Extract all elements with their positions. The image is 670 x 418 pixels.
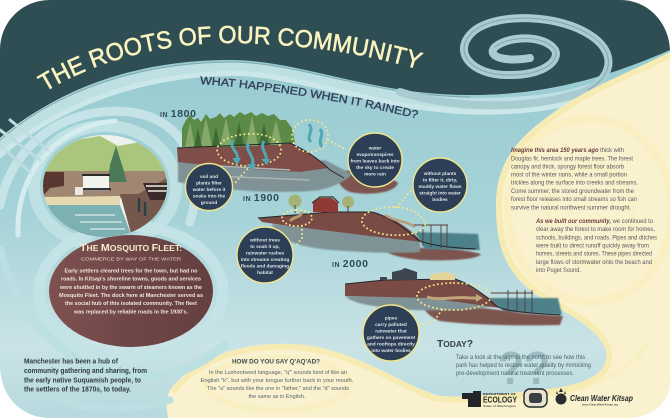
scene: 2000 developed landscape	[345, 268, 563, 326]
text: Manchester community hub: community gathering and sharing, from	[24, 368, 147, 375]
callout: without trees: habitat	[257, 270, 273, 276]
text: Manchester community hub: Manchester has been a hub of	[24, 358, 119, 366]
stormwater pipe	[427, 297, 478, 299]
heading: today: TODAY?	[437, 338, 473, 350]
arrowheads	[232, 158, 270, 171]
stream water	[415, 232, 480, 250]
pronunciation text	[200, 370, 354, 400]
callout: pipes	[363, 305, 419, 361]
dotted callout: muddy flow	[362, 189, 425, 235]
text: as we built our community: schools, buildings, and roads. Pipes and ditches	[536, 235, 657, 241]
dotted callout: evapotranspiration	[292, 120, 345, 152]
text: today	[456, 355, 591, 377]
ground and shore line	[345, 279, 560, 315]
callout: evapotranspiration: from leaves back into	[350, 158, 400, 164]
forest trees	[182, 112, 295, 147]
text: imagine this area: survive the natural northwest summer drought.	[511, 205, 631, 211]
callout: soil and plants: ground	[201, 200, 217, 206]
eroded gully	[290, 212, 302, 221]
logo: Department of Ecology: State of Washington	[483, 404, 516, 408]
panel heading: THE MOSQUITO FLEET:	[80, 243, 182, 254]
trees	[288, 194, 302, 208]
panel body text: roads. In Kitsap's shoreline towns, goods and services	[61, 277, 201, 283]
year label: 1800: IN 1800	[160, 108, 197, 120]
callout: soil and plants: soil and	[200, 174, 218, 180]
callout: pipes: rainwater that	[375, 328, 407, 334]
logo: Department of Ecology: DEPARTMENT OF	[483, 392, 516, 396]
panel body text: Early settlers cleared trees for the town, but had no	[64, 269, 198, 275]
spiral in header	[400, 18, 608, 105]
callout: pipes: pipes	[385, 316, 398, 322]
text: as we built our community: As we built our community, we continued to	[535, 219, 654, 225]
text: today: park has helped to restore water quality by mimicking	[456, 363, 591, 369]
text: Manchester community hub: the settlers of the 1870s, to today.	[24, 386, 131, 394]
logo: Department of Ecology	[462, 391, 518, 408]
callout: without plants: muddy water flows	[418, 184, 462, 190]
panel subheading: COMMERCE BY WAY OF THE WATER	[81, 256, 182, 262]
callout: without trees: floods and damaging	[241, 264, 289, 270]
year label: 1900: IN 1900	[243, 192, 280, 204]
text: imagine this area: trickles along the surface into creeks and streams.	[511, 181, 638, 187]
water	[43, 205, 132, 237]
callout: soil and plants: water before it	[192, 187, 226, 193]
water at shore	[488, 298, 562, 315]
pronunciation text: English "k", but with your tongue further back in your mouth.	[200, 378, 354, 384]
callout: pipes: and rooftops directly	[367, 342, 415, 348]
callout: without trees: rainwater rushes	[246, 250, 285, 256]
posts	[490, 290, 533, 313]
callout: evapotranspiration: water	[368, 146, 381, 152]
brown topsoil	[177, 143, 328, 172]
text: imagine this area: Come summer, the stored groundwater from the	[511, 189, 635, 195]
text: imagine this area: forest floor releases into small streams so fish can	[511, 197, 637, 203]
text: as we built our community: homes, streets and stores. These pipes directed	[536, 252, 652, 258]
callout: without plants: bodies	[432, 197, 448, 203]
panel body text: the social hub of this isolated community. The fleet	[65, 301, 197, 307]
lower brown soil	[423, 306, 563, 325]
beach	[43, 196, 120, 206]
pronunciation heading: HOW DO YOU SAY Q'AQ'AD?	[232, 358, 320, 366]
brown topsoil	[258, 212, 422, 242]
panel body text	[59, 269, 203, 316]
callout: without trees	[237, 227, 293, 283]
pipe arrowhead	[476, 294, 483, 302]
deep brown soil patch	[338, 170, 398, 194]
logo: Clean Water Kitsap: www.CleanWaterKitsap.org	[582, 402, 619, 406]
callout: evapotranspiration: more rain	[364, 172, 386, 178]
steamer boat	[143, 183, 167, 200]
fir tree	[108, 146, 127, 182]
people	[139, 198, 145, 216]
green hills	[43, 136, 167, 175]
text: imagine this area: canopy and thick, spongy forest floor absorb	[511, 165, 625, 171]
callout: soil and plants: soaks into the	[193, 194, 225, 200]
brown soil	[345, 279, 500, 308]
panel body text: Mosquito Fleet. The dock here at Manchester served as	[59, 293, 203, 299]
pronunciation text: The "a" sounds like the one in "father," and the "d" sounds	[207, 386, 349, 392]
text: how do you say	[200, 358, 354, 400]
callout: pipes: into water bodies	[371, 348, 411, 354]
logo: Clean Water Kitsap: Clean Water Kitsap	[570, 393, 633, 403]
lower brown soil	[385, 248, 481, 260]
text: as we built our community	[535, 219, 657, 274]
background: dark teal header	[0, 0, 670, 138]
text: today: pre-development natural treatment processes.	[456, 371, 574, 377]
text: as we built our community: into Puget Sound.	[536, 268, 581, 274]
historic photo illustration of dock	[43, 135, 167, 237]
white building	[75, 174, 111, 195]
shoreline	[258, 212, 476, 249]
text: imagine this area: Imagine this area 150 years ago thick with	[511, 148, 624, 154]
subheading: WHAT HAPPENED WHEN IT RAINED?	[200, 76, 418, 118]
pronunciation text: the same as in English.	[248, 394, 306, 400]
field	[43, 171, 167, 198]
arrows: infiltration	[232, 140, 266, 166]
callout: without trees: without trees	[249, 238, 280, 244]
year label: 2000: IN 2000	[332, 258, 369, 270]
text: Manchester community hub	[24, 358, 147, 394]
swirl rings around photo and oval	[0, 111, 225, 409]
swirl bands along header	[0, 62, 600, 160]
grey bedrock	[272, 224, 420, 253]
text: as we built our community: clear away the forest to make room for homes,	[536, 227, 655, 233]
grey bedrock	[178, 160, 352, 192]
callout: soil and plants: plants filter	[196, 180, 222, 186]
text: as we built our community: large flows of stormwater onto the beach and	[536, 260, 652, 266]
text: as we built our community: were built to direct runoff quickly away from	[535, 244, 649, 250]
brown oval panel: Mosquito Fleet	[49, 235, 213, 347]
scene: 1900 farm landscape	[258, 189, 481, 260]
callout: without plants: straight into water	[419, 190, 461, 196]
panel body text: was replaced by reliable roads in the 1930's.	[73, 310, 188, 316]
pronunciation text: In the Lushootseed language, "q'" sounds kind of like an	[209, 370, 347, 376]
callout: without trees: into streams creating	[241, 257, 289, 263]
text: today: Take a look at the sign to the north to see how this	[456, 355, 585, 361]
text: imagine this area: most of the winter rains, while a small portion	[511, 173, 627, 179]
text: Manchester community hub: the early native Suquamish people, to	[24, 377, 141, 384]
grey bedrock	[345, 296, 495, 310]
logo: Clean Water Kitsap	[556, 388, 633, 406]
callout: pipes: gathers on pavement	[367, 335, 416, 341]
callout: evapotranspiration: the sky to create	[356, 165, 394, 171]
background: pale yellow right panel	[167, 48, 670, 418]
barn	[312, 197, 339, 212]
callout: evapotranspiration	[348, 133, 402, 187]
eroded runoff arrow	[385, 215, 415, 227]
grey streaks	[190, 165, 310, 180]
scene: 1800 forest landscape	[177, 112, 398, 194]
callout: without plants	[413, 158, 467, 212]
brown building	[43, 172, 64, 196]
posts	[410, 225, 448, 248]
text: imagine this area: Douglas fir, hemlock and maple trees. The forest	[511, 156, 633, 162]
dotted callout: erosion	[282, 210, 312, 247]
callout: without plants: without plants	[423, 171, 457, 177]
dotted callout: pipes	[417, 283, 491, 326]
title: THE ROOTS OF OUR COMMUNITY	[36, 26, 424, 90]
callout: without trees: to soak it up,	[250, 244, 280, 250]
callout: soil and plants	[186, 164, 232, 210]
logo: Department of Ecology: ECOLOGY	[483, 396, 518, 404]
pier	[120, 178, 167, 237]
callout: pipes: carry polluted	[375, 322, 407, 328]
text: imagine this area	[511, 148, 638, 211]
panel body text: were shuttled in by the swarm of steamers known as the	[59, 285, 202, 291]
question marks watermark: ??	[498, 342, 550, 394]
callout: evapotranspiration: evapotranspires	[356, 152, 394, 158]
callout: without plants: to filter it, dirty,	[423, 178, 458, 184]
dark ground line	[177, 143, 344, 178]
houses	[380, 268, 455, 280]
dotted callout: soil	[217, 134, 281, 183]
yellow brush strokes	[173, 50, 670, 410]
arrows: evaporation	[309, 124, 322, 147]
logo: round badge	[524, 389, 547, 407]
